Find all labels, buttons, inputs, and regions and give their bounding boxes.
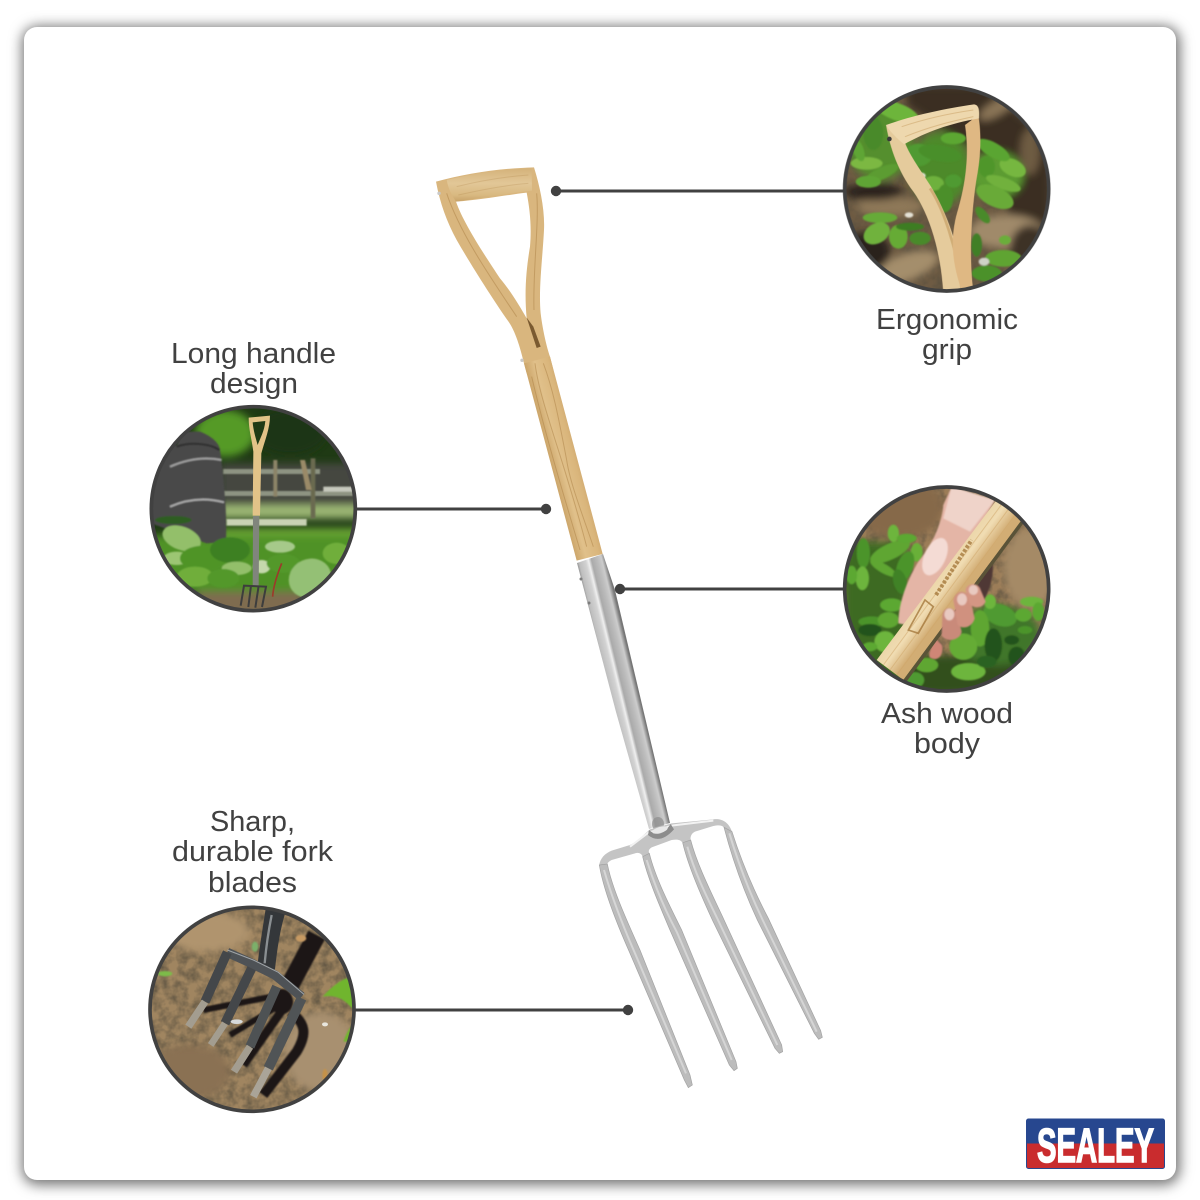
label: ergonomic grip: grip: [922, 334, 972, 366]
product: digging fork: [436, 167, 822, 1088]
label: ergonomic grip: Ergonomic: [876, 304, 1018, 336]
label: ergonomic grip: [876, 304, 1018, 366]
handle in photo: [886, 104, 980, 295]
fork in photo: [188, 907, 304, 1097]
label: sharp durable fork blades: blades: [208, 867, 297, 899]
photo: fork standing in garden: [150, 404, 358, 612]
leader line: grip: [551, 186, 845, 196]
fingers in photo: [942, 584, 986, 640]
leader line: shaft: [615, 584, 845, 594]
callout: ash wood body: [615, 475, 1063, 760]
photo: handle among plants: [842, 85, 1051, 293]
label: long handle design: [171, 338, 336, 400]
callout: sharp durable fork blades: [140, 806, 633, 1128]
wooden D-handle: [436, 167, 603, 561]
fork shadow in photo: [203, 935, 317, 1095]
photo: tines in soil: [148, 906, 356, 1114]
photo: hand holding ash shaft: [842, 485, 1050, 693]
label: sharp durable fork blades: Sharp,: [210, 806, 295, 838]
label: long handle design: design: [210, 368, 298, 400]
label: ash wood body: [881, 698, 1013, 760]
label: ash wood body: Ash wood: [881, 698, 1013, 730]
label: sharp durable fork blades: durable fork: [172, 836, 334, 868]
hand in photo: [898, 487, 995, 659]
water butt in photo: [147, 432, 226, 543]
leader line: blades: [353, 1005, 633, 1015]
ash shaft in photo: [877, 500, 1024, 682]
callout: long handle design: [140, 338, 551, 628]
label: long handle design: Long handle: [171, 338, 336, 370]
fork shaft: stainless steel: [577, 554, 670, 831]
leader line: handle: [355, 504, 551, 514]
fork in photo: [241, 416, 282, 608]
callout: ergonomic grip: [551, 75, 1063, 366]
label: sharp durable fork blades: [172, 806, 334, 899]
fork head: four tines: [599, 819, 822, 1088]
label: ash wood body: body: [914, 728, 981, 760]
